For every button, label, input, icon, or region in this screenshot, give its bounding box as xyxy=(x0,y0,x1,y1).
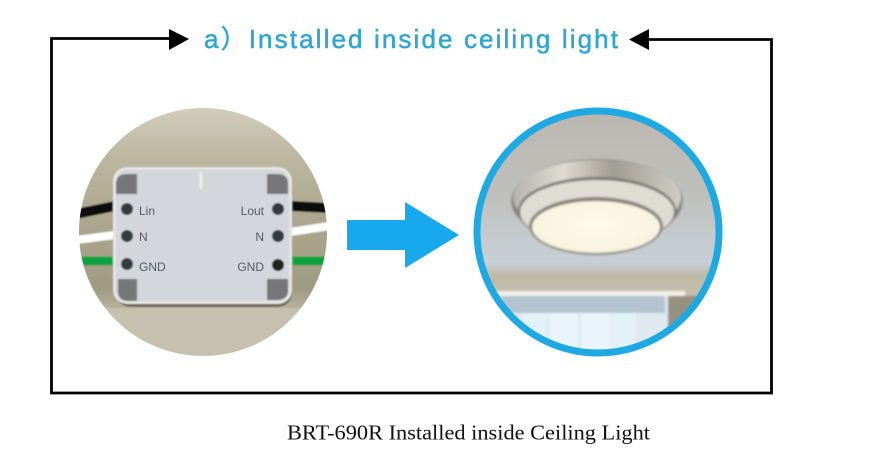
green wires xyxy=(76,256,330,266)
terminal labels xyxy=(139,204,265,274)
device body xyxy=(113,167,292,304)
black wires xyxy=(76,206,330,214)
infographic canvas xyxy=(50,26,773,444)
light lens xyxy=(532,201,660,253)
terminal labels: N xyxy=(255,230,264,244)
caption: BRT-690R Installed inside Ceiling Light xyxy=(287,420,650,444)
terminals xyxy=(121,203,133,215)
terminal labels: Lin xyxy=(139,204,155,218)
blue ring xyxy=(477,111,719,353)
icon: blue arrow xyxy=(347,202,459,268)
corner clips xyxy=(116,174,137,194)
light fixture rim xyxy=(510,158,684,220)
frame line xyxy=(52,38,772,393)
icon: right arrowhead xyxy=(629,29,649,50)
heading: a）Installed inside ceiling light xyxy=(204,24,619,54)
device shadow xyxy=(119,293,292,308)
terminal labels: GND xyxy=(139,260,166,274)
terminal labels: Lout xyxy=(241,204,265,218)
icon: left arrowhead xyxy=(169,29,189,50)
frame with arrows xyxy=(52,29,772,393)
photo: ceiling light xyxy=(475,108,725,363)
terminal labels: N xyxy=(139,230,148,244)
window xyxy=(499,295,670,349)
photo: wiring module xyxy=(75,105,335,360)
wall background xyxy=(79,108,327,309)
ceiling background xyxy=(480,114,716,298)
terminal labels: GND xyxy=(237,260,264,274)
white wires xyxy=(76,226,330,240)
